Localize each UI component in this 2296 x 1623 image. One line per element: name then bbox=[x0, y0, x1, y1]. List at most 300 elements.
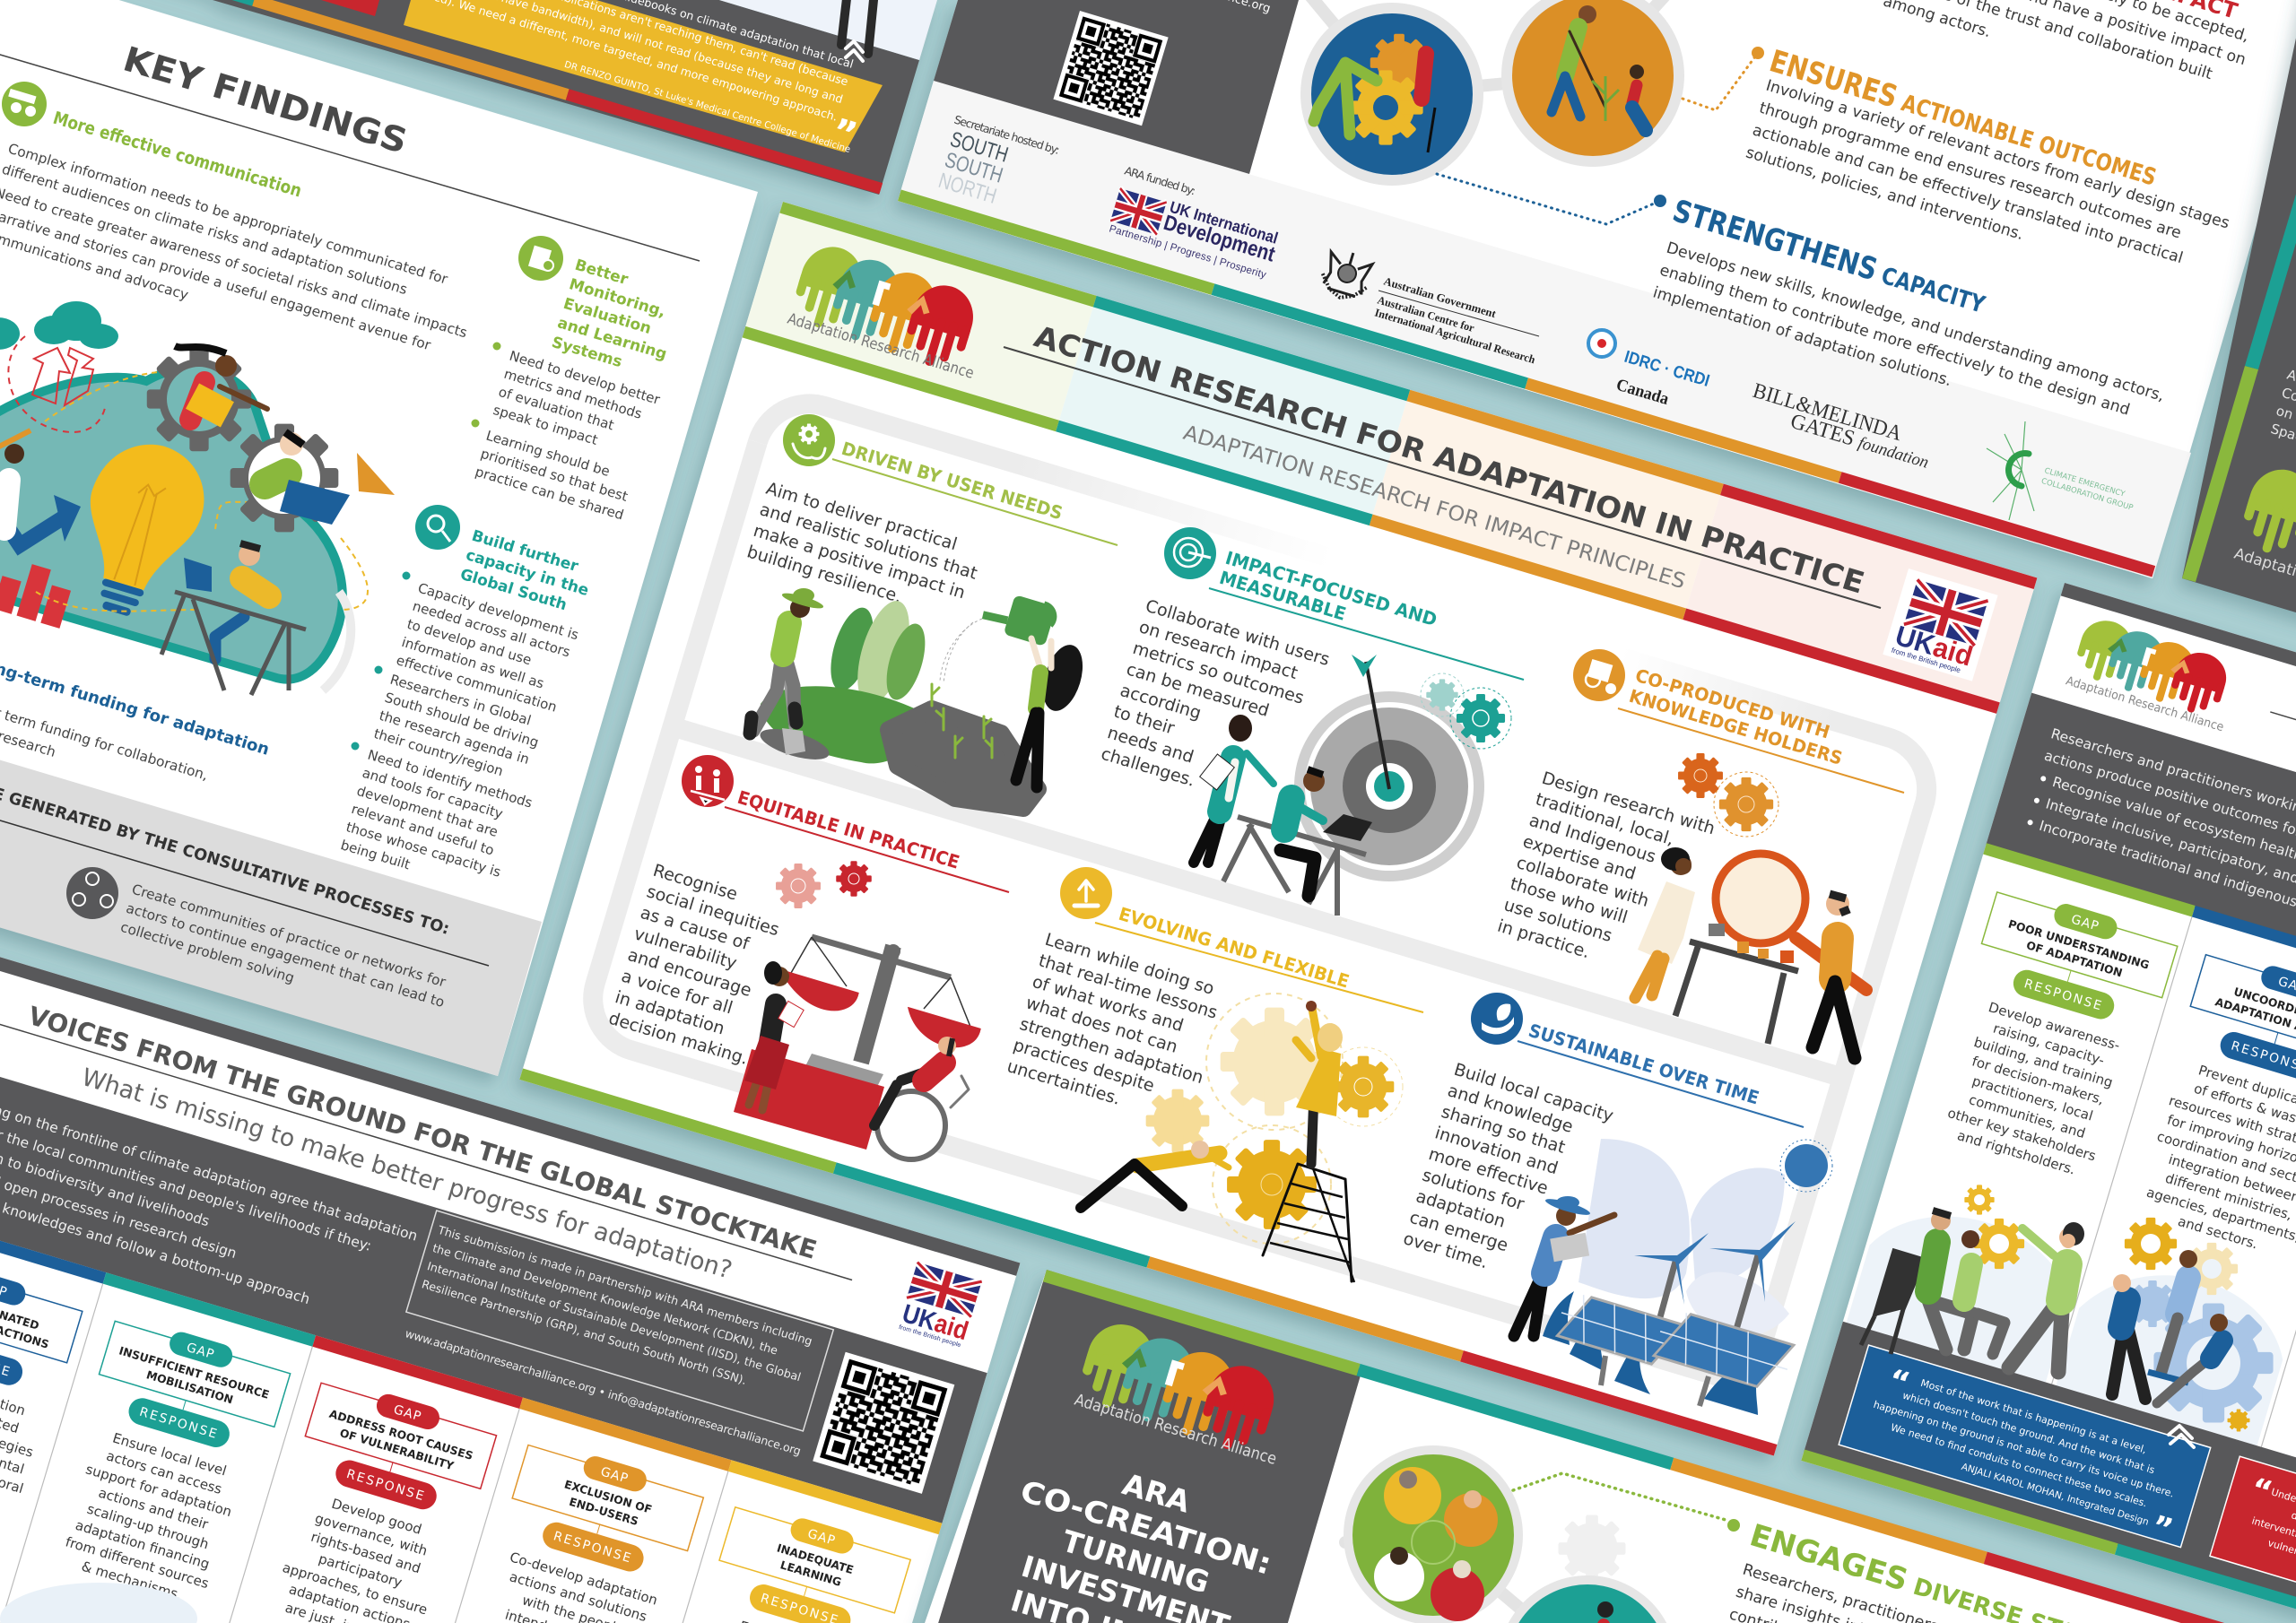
logo: UK International Development: Partnership | Progress | Prosperity bbox=[1108, 223, 1267, 281]
column: address root causes: governance, with bbox=[313, 1510, 430, 1559]
blue quote text: happening on the ground is not able to carry its voice up there. bbox=[1872, 1399, 2176, 1500]
body: Learn while doing so bbox=[1043, 930, 1216, 999]
panel: key findings page bbox=[0, 0, 758, 1076]
heading: better monitoring: Evaluation bbox=[561, 295, 653, 338]
bullets: capacity bbox=[339, 572, 580, 901]
text: ensures body: solutions, policies, and interventions. bbox=[1744, 143, 2025, 244]
body: make a positive impact in bbox=[751, 521, 968, 603]
illustration: farmer and plants bbox=[750, 587, 1090, 808]
column: address root causes: OF VULNERABILITY bbox=[338, 1427, 457, 1473]
logo: UK aid: UKaid bbox=[899, 1299, 971, 1346]
pale illustration backgrounds bbox=[1847, 1186, 2296, 1445]
blue quote text: We need to find conduits to connect these two scales. bbox=[1890, 1421, 2148, 1509]
column: insufficient resource mobilisation: Ensure local level bbox=[110, 1430, 229, 1480]
column: insufficient resource mobilisation: MOBILISATION bbox=[144, 1368, 234, 1406]
body: according bbox=[1118, 681, 1204, 724]
grey footer bbox=[0, 680, 542, 1076]
body: can be measured bbox=[1124, 659, 1272, 721]
icon: hand and leaf bbox=[1471, 993, 1523, 1045]
circle: orange planting bbox=[1501, 0, 1684, 167]
text: strengthens body: enabling them to contribute more effectively to the design and bbox=[1657, 262, 2132, 420]
body: innovation and bbox=[1432, 1123, 1561, 1178]
submission text: Resilience Partnership (GRP), and South South North (SSN). bbox=[421, 1277, 748, 1387]
panel: funders and co-creation page bbox=[898, 0, 2296, 578]
body: on research impact bbox=[1136, 617, 1300, 683]
heading: strengthens capacity: STRENGTHENS CAPACITY bbox=[1668, 193, 1991, 321]
bullets: monitoring bbox=[472, 343, 663, 523]
body: building resilience. bbox=[744, 542, 904, 607]
column: insufficient resource mobilisation: & mechanisms. bbox=[80, 1558, 184, 1603]
blue quote marks: ” bbox=[2147, 1508, 2177, 1549]
subtitle: What is missing to make better progress for adaptation? bbox=[79, 1063, 735, 1285]
heading: DRIVEN BY USER NEEDS bbox=[839, 438, 1065, 524]
title: ACTION RESEARCH FOR ADAPTATION IN PRACTICE bbox=[1031, 318, 1868, 601]
icon: hand and arrows bbox=[1060, 867, 1112, 919]
icon: scales and people bbox=[682, 755, 734, 807]
text: create communities: Create communities of practice or networks for bbox=[130, 881, 448, 991]
body: Aim to deliver practical bbox=[764, 479, 960, 554]
column: poor understanding: practitioners, local bbox=[1970, 1072, 2095, 1124]
heading: more effective communication: More effective communication bbox=[51, 108, 304, 202]
bullets: capacity: Capacity development is bbox=[416, 580, 580, 643]
column: exclusion of end-users: RESPONSE bbox=[552, 1529, 634, 1567]
column: uncoordinated actions: different ministries, bbox=[2163, 1170, 2294, 1223]
paper planes bbox=[0, 430, 395, 495]
dot green bbox=[1727, 1519, 1740, 1532]
bullets: capacity: being built bbox=[339, 837, 413, 872]
text: ensures body: through programme end ensures research outcomes are bbox=[1757, 100, 2183, 243]
text: ensures body: actionable and can be effectively translated into practical bbox=[1751, 121, 2185, 267]
red quote box fragment bbox=[321, 0, 379, 16]
logo: UK aid: from the British people bbox=[898, 1324, 961, 1349]
logo label: Adaptation Research Alliance bbox=[2064, 673, 2225, 734]
bullets: monitoring: prioritised so that best bbox=[479, 446, 630, 505]
logo: ARA bbox=[787, 239, 982, 375]
heading: MEASURABLE bbox=[1217, 567, 1349, 625]
title: ARA bbox=[1118, 1466, 1195, 1520]
header tints bbox=[744, 202, 2037, 707]
stripes: bottom of quote page bbox=[0, 0, 883, 195]
column: uncoordinated actions: and sectors. bbox=[2176, 1213, 2260, 1253]
logo label: Adaptation Research Alliance bbox=[1073, 1391, 1279, 1469]
bullets: monitoring: Learning should be bbox=[484, 428, 612, 480]
illustration: legs and chevron bbox=[841, 0, 874, 61]
label: secretariate: Secretariate hosted by: bbox=[952, 113, 1061, 157]
body: use solutions bbox=[1501, 895, 1614, 946]
text: strengthens body: Develops new skills, knowledge, and understanding among actors, bbox=[1665, 239, 2166, 405]
yellow quote box bbox=[404, 0, 883, 152]
logo: Bill and Melinda Gates foundation bbox=[1750, 379, 1932, 473]
body: needs and bbox=[1105, 723, 1196, 768]
body: expertise and bbox=[1520, 831, 1638, 884]
body: that real-time lessons bbox=[1036, 950, 1220, 1023]
dotted connector orange bbox=[1683, 53, 1758, 110]
body: solutions for bbox=[1420, 1166, 1526, 1214]
dotted connector blue bbox=[1437, 174, 1660, 224]
icon: white chevrons bbox=[2169, 1426, 2194, 1447]
body: can emerge bbox=[1407, 1208, 1510, 1255]
illustration: target and team bbox=[1194, 655, 1511, 916]
bullets: capacity: to develop and use bbox=[405, 616, 534, 668]
stripes bottom bbox=[1801, 1449, 2296, 1623]
text: create communities: actors to continue engagement that can lead to bbox=[125, 900, 447, 1011]
column: exclusion of end-users: Co-develop adaptation bbox=[508, 1549, 659, 1609]
column: poor understanding bbox=[1925, 883, 2180, 1187]
colour stripes bbox=[0, 1147, 942, 1534]
body: those who will bbox=[1508, 874, 1630, 928]
blue quote text: ANJALI KAROL MOHAN, Integrated Design bbox=[1960, 1462, 2150, 1528]
body: sharing so that bbox=[1439, 1102, 1568, 1158]
column: exclusion of end-users bbox=[477, 1436, 706, 1623]
grey frame track bbox=[579, 391, 1944, 1385]
column: address root causes: approaches, to ensure bbox=[281, 1559, 430, 1618]
logo fragment bbox=[2236, 462, 2296, 561]
logo: Australian Government: Australian Centre for bbox=[1376, 293, 1476, 334]
section: impact-focused and measurable bbox=[1099, 527, 1524, 916]
column: address root causes: GAP bbox=[392, 1402, 423, 1425]
grey blob behind cloud bbox=[323, 592, 351, 690]
body: in adaptation bbox=[613, 987, 726, 1038]
column: insufficient resource mobilisation: adaptation financing bbox=[74, 1517, 212, 1573]
circle: green stakeholders bbox=[1344, 1445, 1523, 1623]
body: to their bbox=[1111, 702, 1177, 739]
heading: KNOWLEDGE HOLDERS bbox=[1627, 685, 1845, 769]
icon: hands and gear bbox=[783, 414, 835, 466]
text: communication bullets: Need to create greater awareness of societal risks and climate impacts bbox=[0, 184, 469, 341]
section: co-produced with knowledge holders bbox=[1495, 649, 1904, 1058]
text: communication bullets: Complex information needs to be appropriately communicated for bbox=[6, 141, 450, 288]
logo: Australian Government bbox=[1318, 247, 1539, 366]
column: poor understanding: OF ADAPTATION bbox=[2025, 939, 2124, 979]
dark clouds bbox=[0, 301, 118, 350]
illustration: lab and magnifier bbox=[1635, 753, 1866, 1058]
column: inadequate learning: INADEQUATE bbox=[776, 1541, 855, 1576]
column: poor understanding: Develop awareness- bbox=[1987, 999, 2122, 1054]
logo: UK aid: UKaid bbox=[1892, 620, 1977, 673]
top dark band bbox=[0, 887, 1020, 1276]
gear with man bbox=[230, 424, 350, 532]
body: metrics so outcomes bbox=[1130, 638, 1306, 708]
quote attribution: DR RENZO GUINTO, St Luke's Medical Centre College of Medicine bbox=[563, 60, 851, 155]
column: address root causes: ADDRESS ROOT CAUSES bbox=[327, 1408, 474, 1462]
heading: better monitoring: Monitoring, bbox=[567, 275, 667, 321]
column: insufficient resource mobilisation bbox=[43, 1313, 293, 1615]
red quote mark: “ bbox=[2247, 1471, 2276, 1511]
body: social inequities bbox=[644, 881, 781, 940]
logo: South South North bbox=[935, 127, 1011, 209]
title: CO-CREATION: bbox=[1016, 1473, 1275, 1582]
body: more effective bbox=[1426, 1144, 1551, 1199]
body: Collaborate with users bbox=[1144, 596, 1332, 670]
dark column with QR bbox=[934, 0, 1299, 174]
logo: Bill and Melinda Gates foundation: GATES foundation bbox=[1787, 410, 1932, 473]
text: create communities: collective problem solving bbox=[118, 919, 296, 986]
bulb bbox=[60, 430, 218, 629]
logo: UK International Development: UK International bbox=[1168, 198, 1280, 247]
blue rising arrow bbox=[0, 502, 66, 545]
illustration: renewable energy bbox=[1514, 1139, 1832, 1415]
column: insufficient resource mobilisation: from different sources bbox=[64, 1533, 211, 1592]
column: insufficient resource mobilisation: INSUFFICIENT RESOURCE bbox=[117, 1344, 271, 1402]
body: strengthen adaptation bbox=[1017, 1014, 1205, 1088]
body: and Indigenous bbox=[1526, 811, 1658, 867]
icon: communication bbox=[2, 82, 47, 126]
logo: IDRC CRDI Canada: Canada bbox=[1614, 376, 1672, 409]
blue quote text: Most of the work that is happening is at a level, bbox=[1919, 1377, 2148, 1456]
blue quote box bbox=[1839, 1345, 2211, 1548]
title: TURNING bbox=[1058, 1523, 1213, 1601]
body: over time. bbox=[1401, 1228, 1491, 1272]
bullets: monitoring: of evaluation that bbox=[497, 384, 616, 433]
icon: networks bbox=[66, 867, 118, 919]
column: poor understanding: other key stakeholders bbox=[1945, 1105, 2098, 1165]
heading: IMPACT-FOCUSED AND bbox=[1223, 547, 1439, 630]
logo: Australian Government: International Agricultural Research bbox=[1373, 306, 1536, 366]
bullets: monitoring: metrics and methods bbox=[502, 366, 644, 422]
stripes bbox=[1043, 1270, 2296, 1623]
red quote box bbox=[2210, 1456, 2296, 1623]
heading: EQUITABLE IN PRACTICE bbox=[735, 786, 962, 873]
label: ARA funded by: ARA funded by: bbox=[1123, 164, 1197, 197]
column: poor understanding: and rightsholders. bbox=[1955, 1127, 2077, 1178]
body: challenges. bbox=[1099, 744, 1197, 791]
body: and encourage bbox=[625, 945, 753, 1001]
icon: target bbox=[1164, 527, 1216, 579]
colour stripes bbox=[1983, 843, 2296, 980]
circle: teal partial bbox=[1498, 1575, 1677, 1623]
body: collaborate with bbox=[1514, 853, 1651, 911]
blue quote marks: “ bbox=[1884, 1362, 1914, 1402]
body: uncertainties. bbox=[1004, 1056, 1123, 1109]
icon: monitoring bbox=[518, 236, 563, 281]
section: driven by user needs bbox=[744, 414, 1118, 808]
body: a voice for all bbox=[619, 967, 735, 1018]
logo: UK aid bbox=[1883, 568, 1998, 681]
submission text: This submission is made in partnership with ARA members including bbox=[436, 1223, 814, 1348]
logo: IDRC CRDI Canada bbox=[1588, 330, 1711, 409]
body: as a cause of bbox=[638, 903, 752, 954]
heading: build further capacity: Global South bbox=[458, 566, 569, 614]
panel: voices from the ground page (right) bbox=[1801, 583, 2296, 1623]
heading: build further capacity: capacity in the bbox=[464, 546, 591, 600]
body: adaptation bbox=[1413, 1186, 1508, 1232]
column: uncoordinated actions bbox=[0, 1250, 85, 1571]
body: vulnerability bbox=[631, 924, 739, 973]
blue quote text: which doesn't touch the ground. And the work that is bbox=[1901, 1390, 2156, 1476]
bullets: capacity: the research agenda in bbox=[378, 707, 531, 768]
icon: capacity bbox=[415, 505, 460, 550]
body: Design research with bbox=[1540, 768, 1718, 838]
man at desk bbox=[161, 543, 306, 695]
dark column bbox=[933, 1270, 1362, 1623]
illustration: gears and ladder bbox=[1081, 994, 1403, 1282]
man at left bbox=[4, 444, 24, 529]
body: of what works and bbox=[1030, 972, 1186, 1036]
yellow dashed line bbox=[36, 371, 368, 612]
QR code bbox=[1053, 11, 1169, 126]
text: ensures body: Involving a variety of relevant actors from early design stages bbox=[1764, 77, 2231, 233]
text: communication bullets: different audiences on climate risks and adaptation solutions bbox=[0, 161, 409, 298]
subtitle: ADAPTATION RESEARCH FOR IMPACT PRINCIPLES bbox=[1180, 421, 1688, 594]
pale illustration fragment bbox=[0, 1583, 197, 1623]
QR code bbox=[813, 1352, 954, 1494]
heading: better monitoring: Better bbox=[573, 256, 631, 289]
red dashed circle and arrows bbox=[8, 336, 106, 432]
heading: ensures actionable outcomes: ENSURES ACTIONABLE OUTCOMES bbox=[1765, 43, 2161, 194]
bullets: capacity: those whose capacity is bbox=[344, 819, 503, 881]
bullets: capacity: effective communication bbox=[395, 652, 559, 716]
body: traditional, local, bbox=[1533, 789, 1676, 849]
bullets: capacity: and tools for capacity bbox=[361, 765, 505, 822]
intro bullets bbox=[2027, 776, 2047, 826]
column: address root causes: Develop good bbox=[330, 1496, 423, 1538]
column: exclusion of end-users: EXCLUSION OF bbox=[563, 1478, 654, 1516]
body: Build local capacity bbox=[1452, 1060, 1615, 1126]
panel: top quote page bbox=[0, 0, 937, 195]
dark intro band bbox=[1986, 693, 2296, 1221]
panel: voices from the ground page (bottom left) bbox=[0, 887, 1020, 1623]
column: exclusion of end-users: END-USERS bbox=[568, 1496, 639, 1528]
bullets: monitoring: speak to impact bbox=[491, 402, 600, 448]
column: address root causes: participatory bbox=[317, 1550, 404, 1591]
gear with woman bbox=[147, 346, 267, 451]
dark intro band bbox=[0, 997, 987, 1523]
body: decision making. bbox=[606, 1009, 751, 1069]
column: insufficient resource mobilisation: scaling-up through bbox=[85, 1501, 211, 1552]
column: poor understanding: RESPONSE bbox=[2022, 976, 2105, 1014]
submission box bbox=[406, 1211, 833, 1431]
body: and realistic solutions that bbox=[757, 499, 979, 584]
illustration: cloud with bulb and teams bbox=[0, 301, 395, 695]
bullets: monitoring: Need to develop better bbox=[508, 348, 663, 408]
bullets: capacity: Researchers in Global bbox=[388, 672, 533, 729]
body: Recognise bbox=[651, 861, 740, 905]
logo: Australian Government: Australian Government bbox=[1382, 274, 1498, 320]
bullets: capacity: needed across all actors bbox=[411, 598, 572, 660]
dotted connector green bbox=[1513, 1473, 1726, 1520]
body: practices despite bbox=[1011, 1036, 1157, 1096]
logo strip background bbox=[898, 81, 2191, 578]
heading: CO-PRODUCED WITH bbox=[1633, 664, 1832, 742]
column: poor understanding: POOR UNDERSTANDING bbox=[2006, 917, 2151, 972]
column: inadequate learning: LEARNING bbox=[778, 1558, 843, 1589]
icon: flask and magnifier bbox=[1573, 649, 1625, 701]
logo: UK aid bbox=[897, 1263, 983, 1350]
logo: Climate Emergency Collaboration Group bbox=[1987, 421, 2137, 520]
body: what does not can bbox=[1023, 993, 1180, 1057]
illustration: scales and wheelchair bbox=[734, 861, 979, 1159]
panel: action research main page bbox=[519, 202, 2037, 1455]
logo: ARA bbox=[2070, 614, 2233, 720]
heading: EVOLVING AND FLEXIBLE bbox=[1117, 903, 1352, 993]
red bars bbox=[0, 557, 75, 629]
column: insufficient resource mobilisation: actions and their bbox=[97, 1485, 211, 1532]
column: inadequate learning bbox=[700, 1498, 913, 1623]
body: and knowledge bbox=[1445, 1081, 1575, 1137]
top dark band bbox=[2061, 583, 2296, 972]
column: insufficient resource mobilisation: support for adaptation bbox=[83, 1461, 234, 1520]
column: poor understanding: GAP bbox=[2069, 912, 2100, 934]
text fragment: on bbox=[2274, 403, 2295, 422]
logo: South South North: SOUTH bbox=[947, 127, 1011, 168]
heading: SUSTAINABLE OVER TIME bbox=[1526, 1020, 1761, 1109]
contact line: www.adaptationresearchalliance.org • info@adaptationresearchalliance.org bbox=[404, 1326, 803, 1458]
column: address root causes: rights-based and bbox=[309, 1529, 422, 1576]
logo: IDRC CRDI Canada: IDRC · CRDI bbox=[1622, 348, 1711, 391]
submission text: International Institute of Sustainable Development (IISD), the Global bbox=[426, 1259, 803, 1384]
column: poor understanding: for decision-makers, bbox=[1970, 1053, 2106, 1107]
column: address root causes bbox=[248, 1375, 499, 1623]
section: evolving and flexible bbox=[1004, 867, 1423, 1282]
column: address root causes: RESPONSE bbox=[344, 1467, 427, 1505]
bullets: capacity: South should be driving bbox=[383, 690, 541, 751]
panel: ARA co-creation page (bottom middle) bbox=[897, 1270, 2296, 1623]
stripes: vertical green teal bbox=[2182, 149, 2296, 582]
logo: ARA bbox=[1073, 1316, 1283, 1458]
circle: blue gears bbox=[1300, 3, 1483, 186]
dot orange bbox=[1752, 47, 1764, 59]
section: equitable in practice bbox=[606, 755, 1009, 1159]
dark footer band bbox=[1804, 1322, 2296, 1623]
logo: South South North: SOUTH bbox=[942, 148, 1005, 188]
column: poor understanding: communities, and bbox=[1967, 1091, 2087, 1141]
heading: build further capacity: Build further bbox=[470, 527, 581, 576]
stripes bbox=[519, 202, 2037, 1455]
body: in practice. bbox=[1495, 916, 1592, 962]
logo label: Adaptation Research Alliance bbox=[786, 310, 976, 383]
blue quote marks bbox=[1866, 1362, 2196, 1549]
title: VOICES FROM THE GROUND FOR THE GLOBAL STOCKTAKE bbox=[25, 1001, 820, 1265]
column: poor understanding: raising, capacity- bbox=[1991, 1020, 2107, 1069]
logo: Climate Emergency Collaboration Group: COLLABORATION GROUP bbox=[2040, 477, 2134, 513]
logo: UK International Development bbox=[1108, 188, 1280, 281]
illustration: walking team and blue gears bbox=[2112, 1218, 2274, 1431]
quote marks: ” bbox=[827, 111, 862, 157]
bullets: capacity: Need to identify methods bbox=[366, 747, 535, 812]
logo: Climate Emergency Collaboration Group: CLIMATE EMERGENCY bbox=[2043, 466, 2126, 499]
illustration: seated group and gears bbox=[1861, 1185, 2084, 1372]
bullets: capacity: their country/region bbox=[372, 725, 505, 779]
bullets: capacity: relevant and useful to bbox=[350, 801, 496, 859]
column: insufficient resource mobilisation: GAP bbox=[185, 1341, 216, 1362]
bullets: capacity: information as well as bbox=[400, 634, 546, 692]
text: strengthens body: implementation of adaptation solutions. bbox=[1651, 283, 1953, 390]
connector track between circles bbox=[1292, 0, 1677, 94]
column: exclusion of end-users: GAP bbox=[599, 1464, 631, 1487]
logo: South South North: NORTH bbox=[935, 169, 999, 209]
heading: better monitoring: Systems bbox=[550, 334, 624, 371]
column: inadequate learning: GAP bbox=[805, 1527, 838, 1549]
column: insufficient resource mobilisation: RESPONSE bbox=[137, 1405, 220, 1442]
connector track bbox=[1345, 1535, 1587, 1623]
logo: UK aid: from the British people bbox=[1891, 647, 1962, 674]
heading: better monitoring: and Learning bbox=[555, 314, 669, 364]
panel: far right page bbox=[2182, 0, 2296, 623]
pale gear bbox=[1559, 1515, 1625, 1582]
dot blue bbox=[1654, 195, 1666, 207]
column: poor understanding: building, and training bbox=[1972, 1034, 2115, 1090]
title: KEY FINDINGS bbox=[118, 39, 412, 161]
section: sustainable over time bbox=[1401, 993, 1832, 1415]
stripes: bottom of funders page bbox=[898, 190, 2155, 577]
bullets: monitoring: practice can be shared bbox=[474, 464, 625, 523]
submission text: the Climate and Development Knowledge Network (CDKN), the bbox=[431, 1241, 779, 1358]
column: uncoordinated actions bbox=[2128, 946, 2296, 1267]
column: insufficient resource mobilisation: actors can access bbox=[105, 1447, 224, 1497]
logo: Bill and Melinda Gates foundation: BILL&MELINDA bbox=[1750, 379, 1905, 446]
logo: UK International Development: Development bbox=[1161, 211, 1278, 267]
bullets: capacity: development that are bbox=[355, 783, 500, 840]
